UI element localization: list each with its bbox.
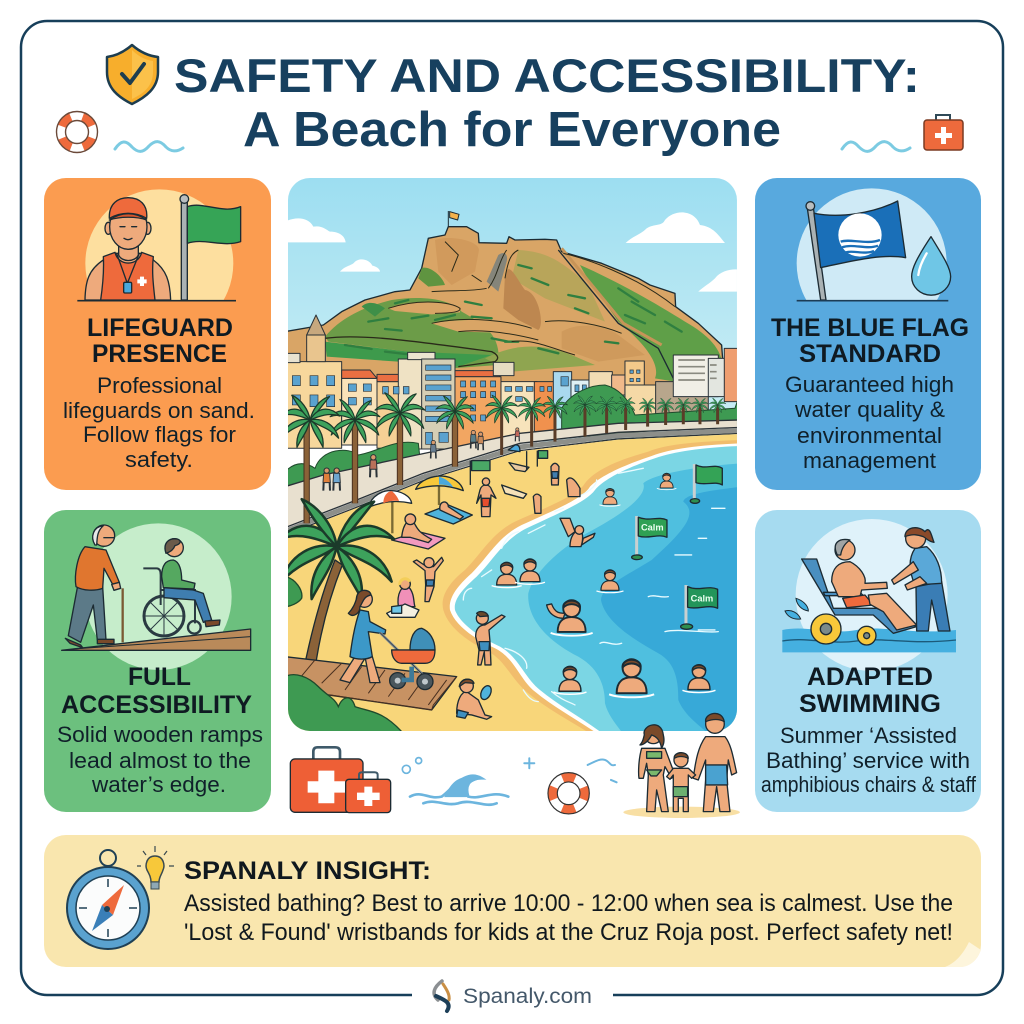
body text: lead almost to the xyxy=(69,748,251,773)
icon: wave xyxy=(402,758,617,805)
body text: Professional xyxy=(97,373,222,398)
illustration: blue flag and water drop xyxy=(796,188,952,302)
icon: wave right xyxy=(842,142,910,151)
central illustration: Alicante beach scene xyxy=(279,175,742,737)
frame gap behind footer xyxy=(412,985,613,1005)
heading: THE BLUE FLAG xyxy=(771,314,969,342)
body text: Follow flags for xyxy=(83,422,236,447)
boardwalk xyxy=(285,657,457,710)
palm row xyxy=(280,393,726,523)
heading: ACCESSIBILITY xyxy=(61,691,252,719)
bottom icons row xyxy=(290,713,740,818)
child arms up xyxy=(413,557,443,602)
panel: lifeguard presence xyxy=(44,178,271,490)
body text: Solid wooden ramps xyxy=(57,722,263,747)
beach people on sand xyxy=(368,445,580,719)
clouds xyxy=(285,212,742,292)
small figures xyxy=(533,494,541,513)
heading: STANDARD xyxy=(799,340,941,368)
body text: Summer ‘Assisted xyxy=(780,723,957,748)
sky xyxy=(285,175,742,442)
building windows xyxy=(292,365,640,444)
panel: adapted swimming xyxy=(755,510,981,812)
icon: first aid kits xyxy=(290,747,391,813)
icon: wave left xyxy=(115,142,183,151)
standing man xyxy=(477,485,496,517)
body text: Bathing’ service with xyxy=(766,748,970,773)
body text xyxy=(761,723,977,797)
logo mark xyxy=(434,981,449,1011)
body text: water’s edge. xyxy=(91,772,226,797)
card background xyxy=(44,178,271,490)
title line 2: A Beach for Everyone xyxy=(243,103,781,157)
body text: water quality & xyxy=(794,397,945,422)
body text xyxy=(63,373,255,472)
heading: LIFEGUARD xyxy=(87,314,233,342)
icon: family xyxy=(623,713,740,818)
heading: SPANALY INSIGHT: xyxy=(184,857,431,885)
card background xyxy=(44,510,271,812)
swimmers xyxy=(492,473,715,697)
illustration: ramp with walker and wheelchair xyxy=(62,523,251,670)
footer brand xyxy=(434,981,592,1011)
body text: amphibious chairs & staff xyxy=(761,772,977,797)
panel: blue flag standard xyxy=(755,178,981,490)
heading: PRESENCE xyxy=(92,340,227,368)
heading xyxy=(61,663,252,719)
title block xyxy=(56,45,963,157)
icon: first aid right xyxy=(924,115,963,150)
sea xyxy=(443,440,742,737)
brand text: Spanaly.com xyxy=(463,985,592,1008)
illustration: amphibious chair with helper xyxy=(782,519,956,671)
card background xyxy=(755,178,981,490)
panel: Spanaly insight xyxy=(44,835,981,967)
heading: ADAPTED xyxy=(807,663,933,691)
foreground bushes xyxy=(285,577,402,732)
body text xyxy=(57,722,263,797)
girl with bucket xyxy=(398,586,415,607)
mother and stroller xyxy=(340,590,435,690)
child with racket xyxy=(457,692,492,719)
boy at water xyxy=(476,615,505,665)
panel: full accessibility xyxy=(44,510,271,812)
heading xyxy=(87,314,233,368)
sea flags xyxy=(632,464,722,629)
sunbathers xyxy=(402,520,432,543)
icon: shield xyxy=(107,45,158,104)
body text: Assisted bathing? Best to arrive 10:00 - 12:00 when sea is calmest. Use the xyxy=(184,890,953,917)
city buildings xyxy=(285,315,742,449)
heading xyxy=(771,314,969,368)
icon: lifebuoy xyxy=(548,773,589,814)
body text: Guaranteed high xyxy=(785,372,954,397)
hedges behind promenade xyxy=(285,385,742,490)
calm flag label two: Calm xyxy=(691,593,713,603)
heading: FULL xyxy=(128,663,191,691)
beach flag xyxy=(470,460,471,485)
card background xyxy=(755,510,981,812)
illustration: lifeguard and green flag xyxy=(77,189,242,302)
body text: lifeguards on sand. xyxy=(63,398,255,423)
heading xyxy=(799,663,941,718)
calm flag label one: Calm xyxy=(641,523,664,533)
title line 1: SAFETY AND ACCESSIBILITY: xyxy=(174,49,920,102)
castle mountain xyxy=(285,211,724,388)
body text: safety. xyxy=(125,447,193,472)
promenade xyxy=(285,420,742,528)
umbrella one xyxy=(368,491,412,533)
fold corner xyxy=(945,942,981,967)
foreground palm xyxy=(279,499,394,682)
icon: lifebuoy left xyxy=(56,112,98,152)
promenade walkers xyxy=(323,428,520,491)
callout background xyxy=(44,835,981,967)
sand xyxy=(285,434,742,732)
towels xyxy=(392,532,445,549)
icon: light bulb xyxy=(137,846,174,889)
body text: environmental xyxy=(797,423,942,448)
body text xyxy=(785,372,954,473)
body text: management xyxy=(803,448,936,473)
heading: SWIMMING xyxy=(799,690,941,718)
icon: compass xyxy=(67,850,149,949)
body text: 'Lost & Found' wristbands for kids at the Cruz Roja post. Perfect safety net! xyxy=(184,919,953,946)
body text xyxy=(184,890,953,946)
umbrella two xyxy=(416,476,463,505)
